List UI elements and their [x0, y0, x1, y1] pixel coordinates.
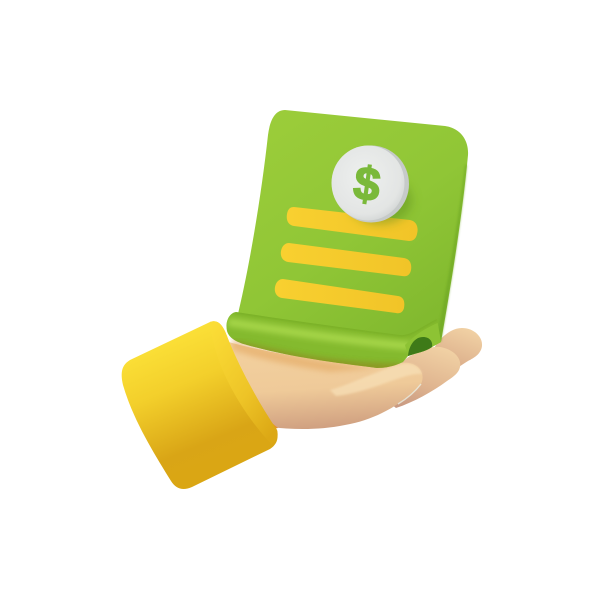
- palm highlight: [330, 364, 422, 396]
- ring finger: [420, 328, 482, 378]
- yellow line 2: [281, 243, 411, 276]
- finger rim light: [398, 384, 421, 404]
- green bill: [220, 110, 468, 375]
- sheet right edge shade: [437, 165, 467, 342]
- yellow line 3: [275, 279, 404, 313]
- roll end: [405, 324, 441, 356]
- reflected shadow under bill: [232, 338, 380, 372]
- cuff rim: [210, 321, 278, 444]
- palm and index finger: [222, 338, 423, 429]
- coin shadow: [348, 176, 412, 224]
- bill sheet: [237, 110, 468, 342]
- roll opening: [408, 337, 432, 356]
- bill bottom roll: [226, 312, 441, 368]
- middle finger: [380, 347, 460, 408]
- dollar sign: $: [350, 155, 384, 212]
- far fingers of the hand: [380, 328, 482, 408]
- yellow sleeve cuff: [122, 321, 278, 489]
- illustration: hand holding a green bill: [122, 110, 482, 489]
- yellow line 1: [287, 207, 418, 241]
- coin: [332, 146, 409, 222]
- cuff opening shadow: [250, 405, 278, 430]
